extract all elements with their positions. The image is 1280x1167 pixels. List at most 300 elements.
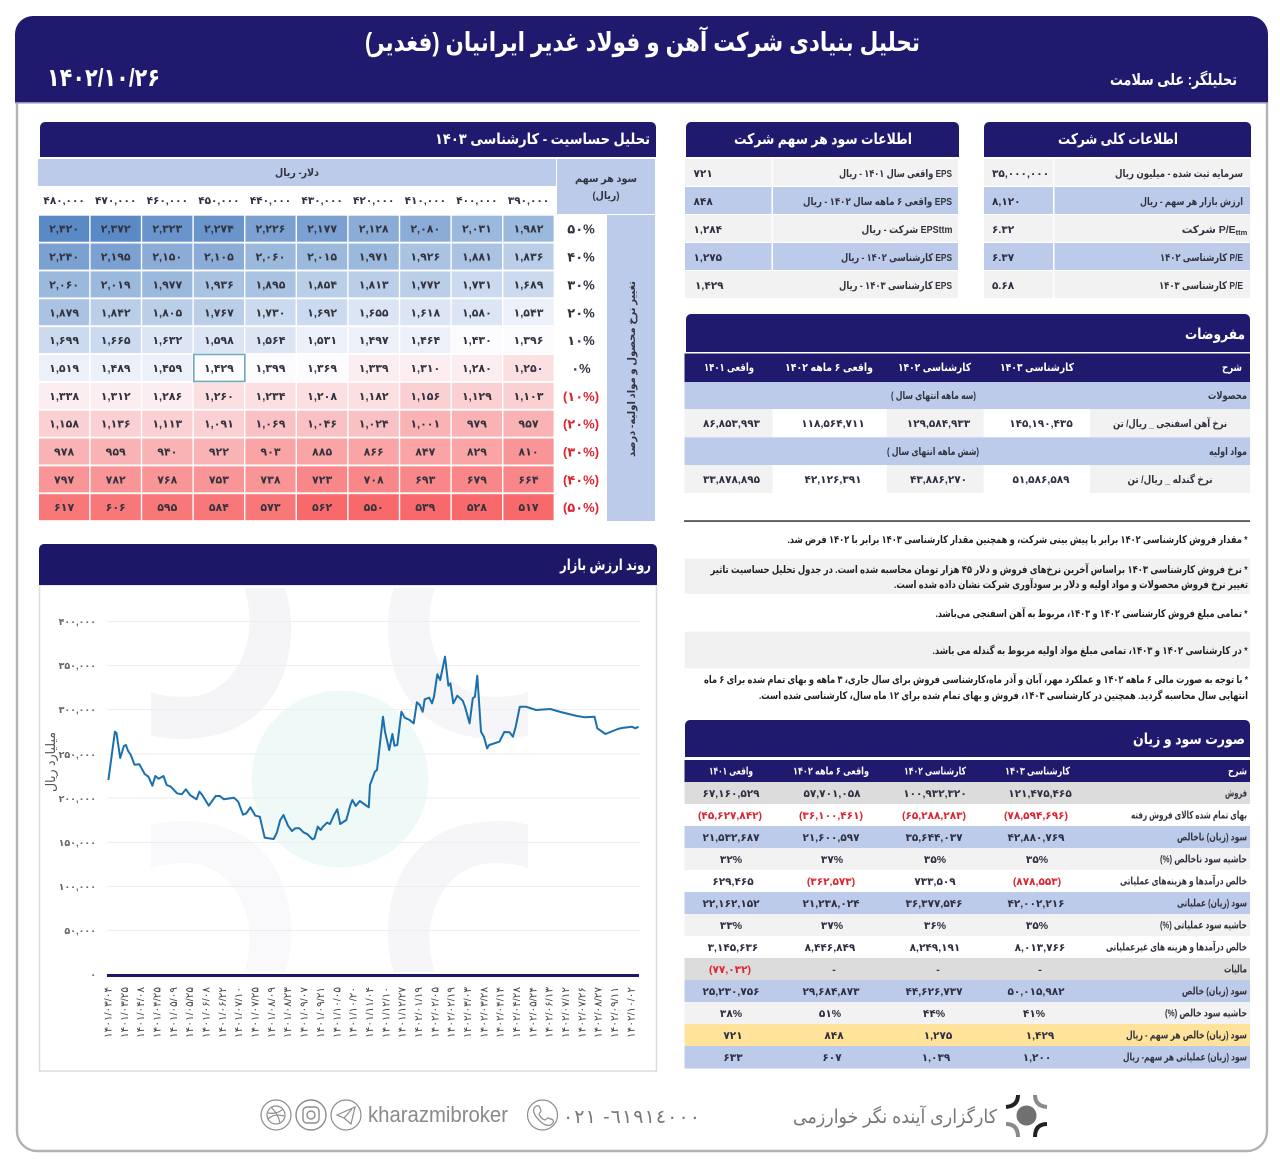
heatmap row 20%: ۱,۵۸۰ [462,307,492,319]
row: gross profit: ۴۲,۸۸۰,۷۶۹ [1007,832,1065,844]
panel: market value chart [39,544,657,1071]
dollar rate column labels: ۴۵۰,۰۰۰ [198,195,240,207]
row: sponge iron rate [684,409,1250,437]
heatmap row 40%: ۲,۱۹۵ [101,252,131,264]
heatmap row 0% with base case highlight: ۱,۵۱۹ [49,363,79,375]
heatmap row 0% with base case highlight [39,354,591,381]
vertical axis label band [607,215,655,521]
heatmap row minus 40% [39,466,599,492]
x axis date labels: ۱۴۰۱/۱۲/۱۰ [380,987,392,1038]
heading: earnings per share [686,122,959,157]
heatmap row minus 50%: (۵۰%) [563,500,599,515]
vertical axis label band: تغییر نرخ محصول و مواد اولیه- درصد [626,281,638,457]
y axis labels: ۳۰۰,۰۰۰ [59,705,96,716]
row: sponge iron rate: ۱۲۹,۵۸۴,۹۳۳ [907,418,971,430]
row: EPS 1402 forecast: EPS کارشناسی ۱۴۰۲ - ریال [841,252,952,264]
heatmap row 50%: ۲,۴۲۰ [49,224,79,236]
heatmap row minus 50%: ۵۳۹ [415,502,436,514]
heatmap row 50%: ۵۰% [567,222,595,237]
row: other operating items: (۳۶۲,۵۷۳) [807,876,855,888]
x axis date labels: ۱۴۰۱/۰۴/۲۵ [152,987,164,1038]
heatmap row minus 20%: ۱,۰۶۹ [256,419,286,431]
heatmap row 20%: ۱,۸۴۲ [101,307,131,319]
row: registered capital: سرمایه ثبت شده - میلیون ریال [1115,168,1243,180]
heatmap row minus 10%: ۱,۲۸۶ [152,391,182,403]
row: EPS 1403 forecast: EPS کارشناسی ۱۴۰۳ - ریال [839,280,952,292]
heatmap row 30%: ۱,۸۵۴ [307,279,337,291]
heading: assumptions: مفروضات [1185,326,1245,343]
dollar rate column labels: ۳۹۰,۰۰۰ [508,195,549,207]
notes block: * مقدار فروش کارشناسی ۱۴۰۲ برابر با پیش بینی شرکت، و همچنین مقدار کارشناسی ۱۴۰۳ برابر با ۱۴۰۲ فرض شد. [788,534,1248,546]
heatmap row minus 40%: ۷۲۳ [312,474,332,486]
y axis labels: ۰ [90,970,96,981]
row: EPS 1402 forecast: ۱,۲۷۵ [694,252,723,264]
panel: company overview [984,122,1251,298]
row: other operating items: ۶۲۹,۴۶۵ [712,876,754,888]
heading: income statement [685,720,1250,757]
heatmap row 10%: ۱۰% [567,333,595,348]
row: sponge iron rate: ۸۶,۸۵۳,۹۹۳ [703,418,761,430]
icon: instagram [296,1100,326,1130]
heatmap row 50%: ۲,۰۸۰ [410,224,440,236]
income statement table header: کارشناسی ۱۴۰۲ [904,766,967,778]
x axis date labels: ۱۴۰۲/۰۱/۱۹ [413,987,425,1038]
heatmap row minus 30%: ۸۱۰ [518,446,539,458]
panel: income statement [684,720,1250,1068]
x axis date labels: ۱۴۰۲/۰۲/۰۵ [429,987,441,1038]
y axis labels: ۱۵۰,۰۰۰ [59,838,96,849]
heatmap row minus 50%: ۵۱۷ [518,502,539,514]
assumptions table header: واقعی ۶ ماهه ۱۴۰۲ [785,362,873,374]
notes block: * تمامی مبلغ فروش کارشناسی ۱۴۰۲ و ۱۴۰۳، مربوط به آهن اسفنجی می‌باشد. [935,607,1248,620]
row: sales [684,782,1250,804]
heatmap row minus 50%: ۵۸۴ [209,502,229,514]
dollar rate column labels: ۴۶۰,۰۰۰ [147,195,188,207]
row: operating profit: ۳۶,۳۷۷,۵۴۶ [905,898,963,910]
notes block: * در کارشناسی ۱۴۰۲ و ۱۴۰۳، تمامی مبلغ مواد اولیه مربوط به گندله می باشد. [932,644,1248,657]
row: tax: - [1038,964,1042,976]
row: PE ttm [984,215,1250,242]
row: EPS 1401 [685,159,958,186]
row: gross profit [684,826,1250,848]
row: sales: ۱۲۱,۴۷۵,۴۶۵ [1008,788,1072,800]
dollar rate column labels: ۴۸۰,۰۰۰ [43,195,85,207]
row: tax: - [832,964,836,976]
row: PE 1403: P/E کارشناسی ۱۴۰۳ [1159,280,1243,292]
chart frame [40,585,656,1071]
row: gross margin: ۳۵% [1026,854,1049,866]
heatmap row minus 20%: ۱,۱۳۶ [101,419,131,431]
divider line above notes [684,520,1250,522]
heatmap row minus 30%: ۸۶۶ [364,446,384,458]
x axis line [107,974,639,977]
heatmap row minus 20%: ۹۷۹ [467,419,487,431]
row: EPS 6 month 1402 [685,187,958,214]
heatmap row 10%: ۱,۴۳۰ [462,335,492,347]
icon: dribbble [261,1100,291,1130]
x axis date labels: ۱۴۰۲/۰۴/۲۸ [511,987,523,1038]
section: products [684,382,1250,409]
heatmap row minus 30%: ۸۸۵ [312,446,332,458]
heatmap row 20%: ۱,۸۷۹ [49,307,79,319]
row: net profit: ۴۴,۶۲۶,۷۳۷ [905,986,963,998]
x axis date labels: ۱۴۰۱/۱۰/۰۵ [331,987,343,1038]
y axis title: میلیارد ریال [43,732,59,792]
heading: earnings per share: اطلاعات سود هر سهم شرکت [734,131,912,148]
assumptions table header: واقعی ۱۴۰۱ [704,362,754,374]
row: net profit [684,980,1250,1002]
heatmap row 30%: ۱,۸۹۵ [256,279,286,291]
row: net EPS highlighted: ۸۴۸ [824,1030,844,1042]
row: non-operating items: ۸,۴۴۶,۸۴۹ [805,942,856,954]
heatmap row minus 50%: ۵۷۳ [260,502,281,514]
row: tax [684,958,1250,980]
heatmap row minus 40%: ۷۸۲ [106,474,126,486]
row: non-operating items: ۳,۱۴۵,۶۳۶ [708,942,758,954]
dollar rate column labels: ۴۲۰,۰۰۰ [353,195,394,207]
heatmap row minus 10%: ۱,۲۶۰ [204,391,234,403]
row: other operating items [684,870,1250,892]
row: PE ttm: ۶.۳۲ [992,224,1015,236]
heading: company overview: اطلاعات کلی شرکت [1058,131,1178,148]
row: operating profit: ۲۲,۱۶۲,۱۵۲ [702,898,760,910]
row: net margin [684,1002,1250,1024]
heatmap row 50% [39,216,595,242]
row: market value: ارزش بازار هر سهم - ریال [1140,196,1243,208]
heatmap row minus 10%: ۱,۱۸۲ [359,391,389,403]
row: net profit: ۲۹,۶۸۴,۸۷۳ [802,986,860,998]
heatmap row 50%: ۱,۹۸۲ [514,224,544,236]
row: gross margin: حاشیه سود ناخالص (%) [1160,854,1247,866]
heatmap row minus 50%: ۵۶۲ [312,502,332,514]
heatmap row 30%: ۱,۷۳۱ [462,279,492,291]
row: EPS ttm: EPSttm شرکت - ریال [862,224,952,236]
dollar rate column labels: ۴۷۰,۰۰۰ [95,195,136,207]
row: pellet rate: ۳۳,۸۷۸,۸۹۵ [703,474,761,486]
heatmap row minus 30%: (۳۰%) [563,444,599,460]
report date: ۱۴۰۲/۱۰/۲۶ [47,64,160,92]
row: PE 1402 [984,243,1250,270]
heatmap row 30%: ۲,۰۶۰ [49,279,79,291]
heatmap row 30%: ۳۰% [567,277,595,292]
section: products: (سه ماهه انتهای سال ) [891,390,976,402]
icon: phone [528,1100,558,1130]
x axis date labels: ۱۴۰۱/۱۰/۲۰ [348,987,360,1038]
row: PE 1402: ۶.۳۷ [992,252,1015,264]
row: EPS 1403 forecast: ۱,۴۲۹ [695,280,724,292]
row: sponge iron rate: نرخ آهن اسفنجی _ ریال/ تن [1113,417,1227,430]
heatmap row 50%: ۲,۲۷۴ [204,224,234,236]
row: other operating items: خالص درآمدها و هزینه‌های عملیاتی [1120,874,1247,888]
y axis labels: ۲۰۰,۰۰۰ [59,794,96,805]
row: cost of goods sold: (۴۵,۶۲۷,۸۴۲) [698,810,762,822]
heatmap row 30%: ۲,۰۱۹ [101,279,131,291]
assumptions table header: کارشناسی ۱۴۰۳ [1000,362,1074,374]
x axis date labels: ۱۴۰۲/۰۲/۱۹ [446,987,458,1038]
broker name: کارگزاری آینده نگر خوارزمی [793,1104,998,1128]
income statement table header: واقعی ۱۴۰۱ [709,766,753,778]
heading: income statement: صورت سود و زیان [1133,731,1245,748]
heatmap row 20%: ۱,۶۹۲ [307,307,337,319]
row: operating margin: حاشیه سود عملیاتی (%) [1160,920,1247,932]
row: PE 1403: ۵.۶۸ [992,280,1015,292]
row: PE ttm: شرکت [1182,224,1219,236]
x axis date labels: ۱۴۰۲/۰۸/۲۷ [593,987,605,1038]
x axis date labels: ۱۴۰۱/۰۸/۰۹ [266,987,278,1038]
row: EPS 6 month 1402: ۸۴۸ [694,196,713,208]
row: gross profit: سود (زیان) ناخالص [1177,832,1247,844]
dollar rate column labels: ۴۳۰,۰۰۰ [301,195,343,207]
row: net EPS highlighted: ۱,۴۲۹ [1026,1030,1055,1042]
row: operating EPS: ۶۰۷ [822,1052,842,1064]
y axis labels: ۴۰۰,۰۰۰ [59,617,96,628]
heatmap row minus 10%: ۱,۲۰۸ [307,391,337,403]
heatmap row minus 20%: ۱,۱۱۳ [152,419,183,431]
x axis date labels: ۱۴۰۲/۰۴/۱۴ [495,987,507,1038]
x axis date labels: ۱۴۰۲/۰۵/۲۴ [527,987,539,1038]
heatmap row 40%: ۴۰% [567,250,595,265]
row: sales: ۱۰۰,۹۳۲,۳۲۰ [903,788,967,800]
panel: sensitivity analysis [38,122,656,521]
row: gross margin: ۳۲% [720,854,743,866]
heatmap row minus 10%: ۱,۳۱۲ [101,391,131,403]
heatmap row 20%: ۲۰% [567,305,595,320]
row: gross profit: ۲۱,۵۳۲,۶۸۷ [702,832,760,844]
row: net margin: حاشیه سود خالص (%) [1165,1008,1247,1020]
heatmap row 20%: ۱,۵۴۳ [514,307,544,319]
row: pellet rate: نرخ گندله _ ریال/ تن [1128,473,1213,486]
heatmap row minus 10%: ۱,۲۳۴ [256,391,286,403]
heatmap row 10%: ۱,۶۹۹ [49,335,79,347]
income statement table header: کارشناسی ۱۴۰۳ [1005,766,1071,778]
dollar rate column labels: ۴۱۰,۰۰۰ [405,195,446,207]
x axis date labels: ۱۴۰۱/۰۹/۲۱ [315,987,327,1038]
heatmap row 40%: ۱,۹۷۱ [359,252,389,264]
heatmap row minus 20%: ۱,۰۴۶ [307,419,337,431]
icon: telegram [331,1100,361,1130]
heatmap row 20% [39,299,595,325]
row: operating margin [684,914,1250,936]
heading: market value trend: روند ارزش بازار [559,557,651,574]
row: tax: (۷۷,۰۳۲) [709,964,751,976]
heatmap row minus 50%: ۶۱۷ [54,502,74,514]
heading: sensitivity analysis [40,122,656,157]
row: net margin: ۵۱% [819,1008,842,1020]
y axis labels: ۵۰,۰۰۰ [64,926,96,937]
heatmap row 0% with base case highlight: ۱,۴۸۹ [101,363,131,375]
heatmap row minus 40%: ۷۰۸ [364,474,384,486]
heatmap row minus 10%: (۱۰%) [563,389,599,404]
row: gross margin: ۳۵% [924,854,947,866]
section: products: محصولات [1208,390,1247,402]
heatmap row 40%: ۲,۰۱۵ [307,252,337,264]
row: EPS 1401: EPS واقعی سال ۱۴۰۱ - ریال [839,168,952,180]
heatmap row 10% [39,327,595,353]
row: EPS 1403 forecast [685,271,958,298]
row: tax: - [936,964,940,976]
row: operating margin: ۳۵% [1026,920,1049,932]
row: pellet rate [684,465,1250,493]
row: net EPS highlighted: ۷۲۱ [723,1030,743,1042]
title: تحلیل بنیادی شرکت آهن و فولاد غدیر ایرانیان (فغدیر) [365,26,920,58]
heatmap row minus 40%: ۶۷۹ [467,474,487,486]
heatmap row 0% with base case highlight: ۱,۳۶۹ [307,363,337,375]
header box: earnings per share rial: سود هر سهم [575,173,637,185]
income statement table header [684,760,1250,782]
heatmap row 50%: ۲,۱۷۷ [307,224,337,236]
heatmap row 20%: ۱,۶۱۸ [410,307,441,319]
heatmap row minus 30%: ۹۴۰ [157,446,177,458]
row: operating profit: سود (زیان) عملیاتی [1177,898,1247,910]
heatmap row minus 20%: (۲۰%) [563,417,599,432]
heatmap row minus 20%: ۱,۰۰۱ [410,419,440,431]
x axis date labels: ۱۴۰۱/۰۳/۰۴ [102,987,114,1038]
heatmap row 30%: ۱,۹۳۶ [204,279,234,291]
heatmap row minus 50% [39,494,599,520]
row: operating profit: ۴۲,۰۰۲,۲۱۶ [1007,898,1065,910]
x axis date labels: ۱۴۰۱/۰۶/۲۲ [217,987,229,1038]
heatmap row 20%: ۱,۷۶۷ [204,307,234,319]
heatmap row 50%: ۲,۱۲۸ [359,224,389,236]
row: non-operating items [684,936,1250,958]
heatmap row minus 30% [39,438,599,464]
section: raw materials: مواد اولیه [1209,446,1247,458]
row: pellet rate: ۵۱,۵۸۶,۵۸۹ [1012,474,1070,486]
row: EPS ttm: ۱,۲۸۴ [694,224,723,236]
assumptions table header: کارشناسی ۱۴۰۲ [898,362,971,374]
x axis date labels: ۱۴۰۱/۰۶/۰۸ [200,987,212,1038]
heatmap row 40% [39,244,595,270]
row: sponge iron rate: ۱۱۸,۵۶۴,۷۱۱ [801,418,865,430]
row: sponge iron rate: ۱۴۵,۱۹۰,۴۳۵ [1009,418,1073,430]
heatmap row minus 30%: ۸۲۹ [467,446,487,458]
row: operating margin: ۳۶% [924,920,947,932]
row: operating margin: ۳۷% [821,920,844,932]
heatmap row 50%: ۲,۲۲۶ [256,224,285,236]
analyst: تحلیلگر: علی سلامت [1110,70,1237,89]
row: cost of goods sold [684,804,1250,826]
header box: earnings per share rial [557,159,655,214]
row: PE 1402: P/E کارشناسی ۱۴۰۲ [1160,252,1243,264]
heatmap row minus 20%: ۱,۰۹۱ [204,419,234,431]
heatmap row 10%: ۱,۴۶۴ [410,335,441,347]
row: PE ttm: ttm [1236,228,1248,237]
heatmap row 10%: ۱,۶۳۲ [152,335,183,347]
heatmap row minus 40%: ۷۵۳ [209,474,229,486]
heading: sensitivity analysis: تحلیل حساسیت - کارشناسی ۱۴۰۳ [435,131,650,148]
y axis labels: ۳۵۰,۰۰۰ [59,661,96,672]
phone number: ٠٢١ -٦١٩١٤٠٠٠ [563,1107,700,1128]
x axis date labels: ۱۴۰۲/۰۷/۱۲ [560,987,572,1038]
heatmap row 10%: ۱,۴۹۷ [359,335,389,347]
header band: dollar rate [38,159,556,186]
heatmap row 50%: ۲,۳۲۳ [152,224,183,236]
section: raw materials [684,437,1250,465]
heatmap row 10%: ۱,۵۶۴ [256,335,286,347]
website handle: kharazmibroker [368,1102,508,1127]
row: operating EPS [684,1046,1250,1068]
x axis date labels: ۱۴۰۱/۰۷/۲۵ [250,987,262,1038]
heatmap row minus 40%: ۷۳۸ [260,474,281,486]
heatmap row 40%: ۲,۲۴۰ [49,252,79,264]
heatmap row 40%: ۱,۸۸۱ [462,252,492,264]
heatmap row minus 50%: ۵۲۸ [467,502,487,514]
header box: earnings per share rial: (ریال) [592,190,620,202]
heatmap row minus 30%: ۸۴۷ [415,446,436,458]
heatmap row 30%: ۱,۹۷۷ [152,279,183,291]
heatmap row minus 30%: ۹۰۳ [260,446,281,458]
heatmap row minus 10% [39,383,599,409]
x axis date labels: ۱۴۰۲/۰۶/۱۳ [544,987,556,1038]
heatmap row 0% with base case highlight: ۰% [571,361,591,376]
heatmap row 30%: ۱,۷۷۲ [410,279,441,291]
heatmap row 20%: ۱,۶۵۵ [359,307,389,319]
heatmap row minus 50%: ۶۰۶ [106,502,126,514]
heatmap row 0% with base case highlight: ۱,۴۵۹ [152,363,183,375]
heatmap row minus 50%: ۵۹۵ [157,502,178,514]
x axis date labels: ۱۴۰۱/۰۴/۰۸ [135,987,147,1038]
row: gross profit: ۲۱,۶۰۰,۵۹۷ [802,832,860,844]
heatmap row minus 10%: ۱,۱۲۹ [462,391,492,403]
x axis date labels: ۱۴۰۱/۱۱/۰۴ [364,987,376,1038]
row: cost of goods sold: (۷۸,۵۹۴,۶۹۶) [1004,810,1068,822]
section: raw materials: (شش ماهه انتهای سال ) [887,446,979,458]
heatmap row minus 10%: ۱,۱۵۶ [410,391,440,403]
heatmap row minus 30%: ۹۷۸ [54,446,74,458]
heading: market value trend [39,544,657,585]
assumptions table header: شرح [1222,362,1242,374]
row: other operating items: ۷۳۳,۵۰۹ [914,876,956,888]
heatmap row 20%: ۱,۸۰۵ [152,307,183,319]
notes block: * با توجه به صورت مالی ۶ ماهه ۱۴۰۲ و عملکرد مهر، آبان و آذر ماه،کارشناسی فروش برای سال جاری، ۳ ماهه و بهای تمام شده برای ۶ ماه [704,673,1249,686]
heatmap row 30%: ۱,۶۸۹ [514,279,544,291]
heatmap row minus 40%: (۴۰%) [563,472,599,487]
income statement table header: شرح [1228,766,1247,778]
heatmap row 40%: ۱,۹۲۶ [410,252,440,264]
row: sales: فروش [1225,788,1247,800]
row: gross margin [684,848,1250,870]
row: cost of goods sold: (۳۶,۱۰۰,۴۶۱) [799,810,863,822]
heatmap row 10%: ۱,۵۹۸ [204,335,234,347]
x axis date labels: ۱۴۰۲/۰۷/۲۶ [576,987,588,1038]
heatmap row 10%: ۱,۶۶۵ [101,335,131,347]
row: non-operating items: ۸,۰۱۳,۷۶۶ [1015,942,1065,954]
heatmap row 10%: ۱,۵۳۱ [307,335,337,347]
x axis date labels: ۱۴۰۲/۰۹/۱۱ [609,987,621,1038]
heatmap row minus 20%: ۹۵۷ [518,419,539,431]
row: operating EPS: ۶۳۳ [723,1052,743,1064]
heatmap row minus 30%: ۹۲۲ [209,446,229,458]
row: net profit: ۲۵,۲۳۰,۷۵۶ [702,986,760,998]
x axis date labels: ۱۴۰۱/۰۷/۱۰ [233,987,245,1038]
x axis date labels: ۱۴۰۱/۰۹/۰۷ [299,987,311,1038]
dollar rate column labels [43,195,549,207]
row: tax: مالیات [1224,964,1247,976]
row: EPS 1401: ۷۲۱ [694,168,713,180]
row: cost of goods sold: (۶۵,۲۸۸,۲۸۳) [902,810,966,822]
y axis labels [59,617,96,981]
heatmap row 50%: ۲,۳۷۲ [101,224,131,236]
row: net profit: سود (زیان) خالص [1182,986,1247,998]
row: operating profit: ۲۱,۲۳۸,۰۲۴ [802,898,860,910]
x axis date labels: ۱۴۰۲/۰۳/۲۸ [478,987,490,1038]
row: PE ttm: P/E [1219,224,1236,236]
row: net margin: ۴۴% [923,1008,946,1020]
row: sales: ۵۷,۷۰۱,۰۵۸ [803,788,861,800]
row: sales: ۶۷,۱۶۰,۵۲۹ [702,788,760,800]
x axis date labels: ۱۴۰۲/۰۳/۰۳ [462,987,474,1038]
row: gross margin: ۳۷% [821,854,844,866]
